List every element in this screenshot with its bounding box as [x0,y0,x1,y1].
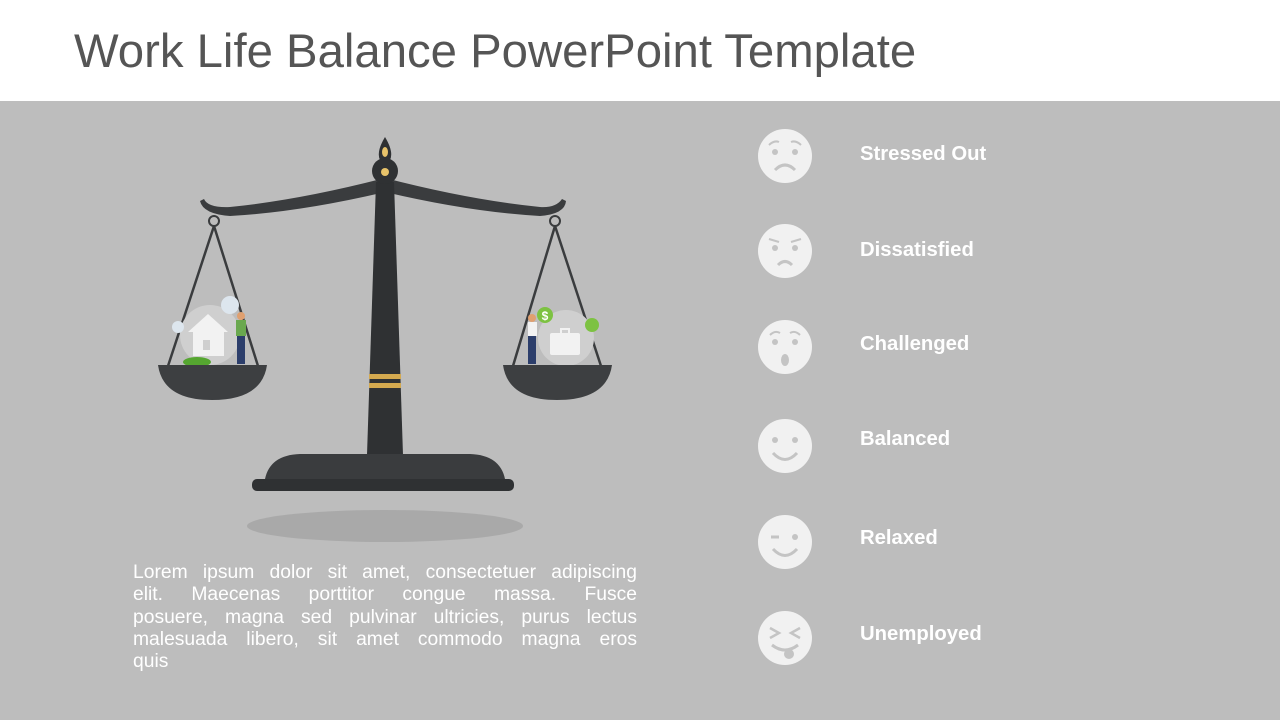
body text: elit. Maecenas porttitor congue massa. Fusce [133,584,637,605]
face: challenged [758,320,812,374]
header bar [0,0,1280,101]
mood faces [758,129,812,665]
face: relaxed [758,515,812,569]
right pan: work [503,307,612,400]
label: balanced: Balanced [860,428,950,450]
label: unemployed: Unemployed [860,623,982,645]
body text: quis [133,651,168,672]
face: balanced [758,419,812,473]
left pan: life [158,296,267,400]
face: unemployed [758,611,812,665]
label: dissatisfied: Dissatisfied [860,239,974,261]
face: dissatisfied [758,224,812,278]
scale [168,137,601,491]
body text: posuere, magna sed pulvinar ultricies, purus lectus [133,607,637,628]
title: Work Life Balance PowerPoint Template [74,25,916,78]
label: challenged: Challenged [860,333,969,355]
label: relaxed: Relaxed [860,527,938,549]
body text: malesuada libero, sit amet commodo magna eros [133,629,637,650]
label: stressed out: Stressed Out [860,143,986,165]
right pan: work: $ [542,309,549,323]
body text [133,562,637,672]
shadow [247,510,523,542]
face: stressed [758,129,812,183]
body text: Lorem ipsum dolor sit amet, consectetuer adipiscing [133,562,637,583]
